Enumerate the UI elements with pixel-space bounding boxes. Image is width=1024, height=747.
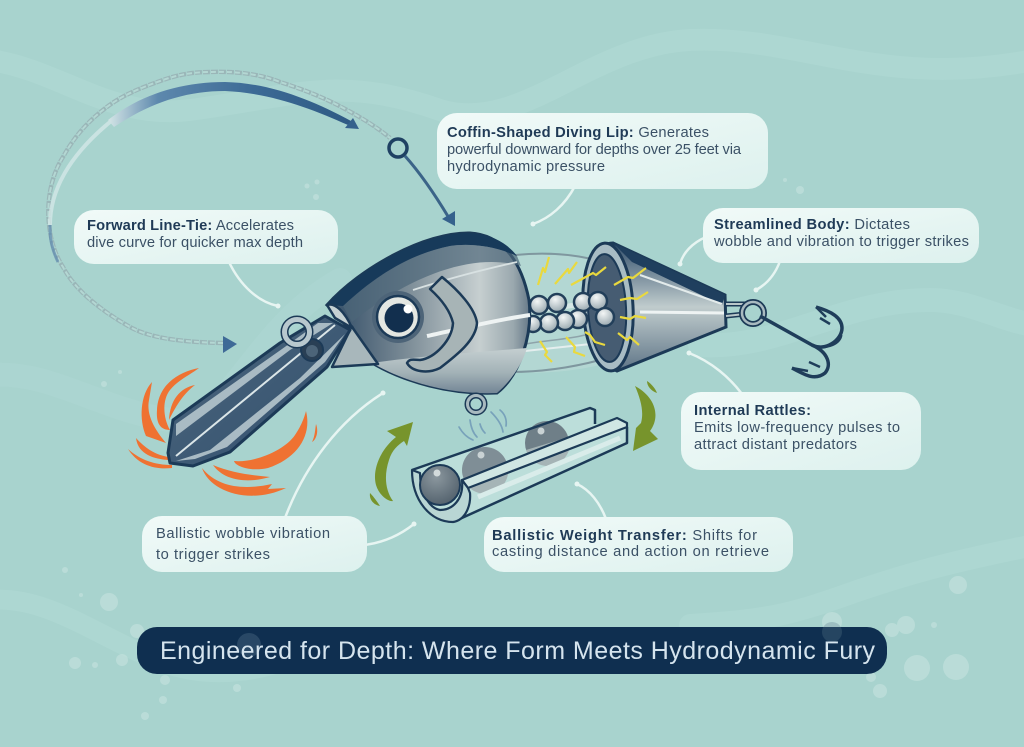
ballistic weight tube [412,408,627,522]
callout: ballistic weight transfer: casting distance and action on retrieve [492,544,769,560]
callout: coffin-shaped diving lip: powerful downward for depths over 25 feet via [447,142,742,158]
title banner: Engineered for Depth: Where Form Meets Hydrodynamic Fury [160,637,876,665]
gill plate [407,277,477,371]
callout: ballistic wobble vibration: Ballistic wobble vibration [156,526,330,542]
far ball [525,421,569,465]
translucent mid body [510,253,600,373]
orange vibration marks [128,368,317,496]
callout: coffin-shaped diving lip: Coffin-Shaped Diving Lip: Generates [447,125,709,141]
title banner [137,622,887,674]
lower body highlights and outline [478,438,620,497]
front rim band [462,418,627,488]
green arrow right [633,381,658,451]
callout: streamlined body: wobble and vibration to trigger strikes [713,234,969,250]
rear cone [580,242,726,372]
lip line-tie ring highlight [284,320,310,344]
tail ring and treble hook [726,302,842,377]
yellow vibration sparks [538,257,648,362]
callout: forward line-tie [74,210,338,308]
callout: streamlined body [678,208,979,292]
eye [372,291,424,343]
callout: internal rattles: Internal Rattles: [694,403,811,419]
fish head [327,233,530,393]
callout: ballistic wobble vibration [142,390,416,572]
rattle balls [525,292,614,332]
lure [168,233,842,466]
callout: internal rattles [681,350,921,470]
fishing line chain [48,72,390,343]
tube body [412,408,627,522]
callout: ballistic weight transfer: Ballistic Weight Transfer: Shifts for [492,528,757,544]
arrow head at line end [223,336,237,353]
middle ball [462,447,508,493]
front opening crescent [412,470,470,522]
callout: forward line-tie: dive curve for quicker max depth [87,235,303,251]
green arrow left [370,422,413,506]
callout: forward line-tie: Forward Line-Tie: Accelerates [87,218,294,234]
callout: internal rattles: attract distant predators [694,437,857,453]
belly eye [468,396,484,412]
callout: streamlined body: Streamlined Body: Dictates [714,217,910,233]
line eye and arrow to lip [389,139,455,226]
callout: coffin-shaped diving lip [437,113,768,226]
back rim [412,408,595,470]
callout: internal rattles: Emits low-frequency pulses to [694,420,900,436]
callout: ballistic weight transfer [484,482,793,572]
callout: coffin-shaped diving lip: hydrodynamic pressure [447,159,605,175]
near ball [420,465,460,505]
blue ripples under belly eye [459,410,506,440]
diving lip [168,316,350,466]
casting arc arrow [50,82,359,262]
lip line-tie ring [284,320,310,344]
bubbles [62,178,969,720]
callout: ballistic wobble vibration: to trigger strikes [156,547,270,563]
